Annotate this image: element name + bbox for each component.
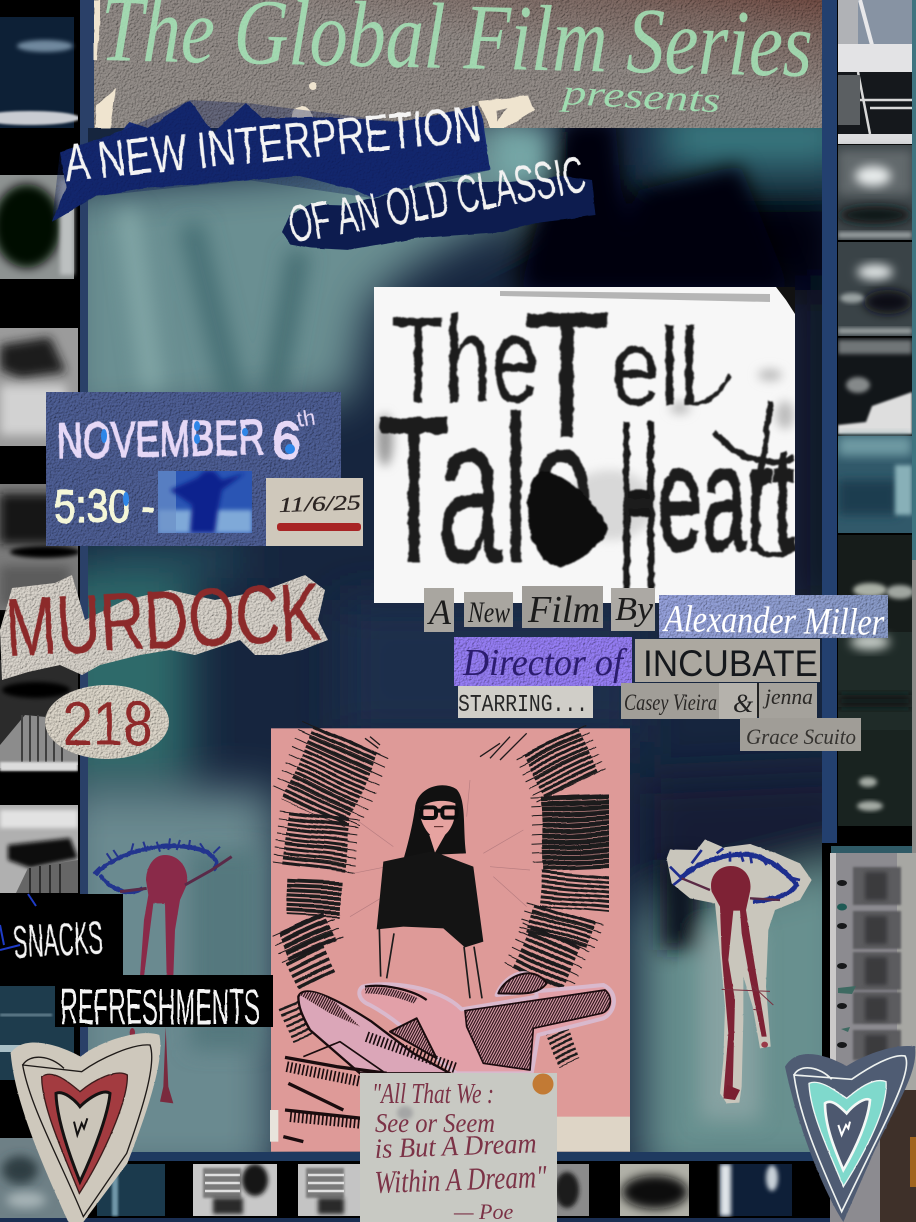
eyelid with thorns xyxy=(95,846,217,892)
paper heart with red outline xyxy=(11,1033,160,1222)
poem text: See or Seem xyxy=(375,1108,495,1138)
photo: blue silhouette xyxy=(158,471,252,533)
inner heart xyxy=(825,1099,870,1170)
bottom frame 2 xyxy=(193,1164,277,1216)
tag: A xyxy=(424,588,454,632)
title card: The Tell Tale Heart xyxy=(374,287,795,603)
pink illustration: figure with pointing hand xyxy=(270,728,630,1152)
pointing hand xyxy=(283,973,614,1142)
tag: A: A xyxy=(427,592,452,632)
outer heart line xyxy=(794,1056,907,1212)
figure xyxy=(350,780,530,998)
fine light rays xyxy=(350,780,530,917)
tag: Film: Film xyxy=(527,589,600,631)
note card: 11/6/25 xyxy=(266,478,363,546)
header panel: The Global Film Series presents xyxy=(94,0,822,132)
poem text: "All That We : xyxy=(372,1079,494,1110)
mouth xyxy=(434,825,443,828)
left bleeding eye xyxy=(93,838,232,1103)
poem text: Within A Dream" xyxy=(374,1158,548,1200)
title word: Tell: T xyxy=(523,274,611,476)
title word: eart: eart xyxy=(658,415,795,582)
glasses xyxy=(421,807,457,818)
text: presents: presents xyxy=(558,72,721,120)
right film strip xyxy=(838,0,914,826)
tag: ampersand xyxy=(719,683,759,719)
red heart band xyxy=(42,1073,127,1193)
film frame r1 xyxy=(838,0,912,144)
torn banner: of an old classic xyxy=(282,146,596,255)
film frame r3 xyxy=(838,242,912,336)
tag: ampersand: & xyxy=(733,689,754,718)
label: Snacks xyxy=(0,894,123,975)
label: Refreshments xyxy=(55,975,273,1035)
tag: Incubate: INCUBATE xyxy=(643,643,818,684)
radiating hatch marks xyxy=(290,740,580,1063)
tag: Grace Scuito: Grace Scuito xyxy=(746,724,856,749)
poem note xyxy=(360,1073,557,1222)
sweater xyxy=(377,852,483,947)
banner text line 2: OF AN OLD CLASSIC xyxy=(284,146,590,255)
title word: Tale: Tale xyxy=(378,373,594,608)
bottom frame 3 xyxy=(298,1164,360,1216)
bottom frame 1 xyxy=(97,1164,165,1216)
mint heart band xyxy=(809,1081,886,1187)
eyelid with thorns xyxy=(680,854,797,902)
small mark xyxy=(74,1118,87,1135)
title lettering xyxy=(378,311,795,589)
torn banner: a new interpretation xyxy=(52,95,490,222)
heavy ink blob xyxy=(527,470,607,566)
header cream paint marks xyxy=(94,0,534,132)
film frame r7 xyxy=(838,632,912,730)
film frame 3 xyxy=(0,328,78,446)
bottom frame 4 xyxy=(555,1164,589,1216)
film frame 2 xyxy=(0,175,74,279)
t crossbar and tail xyxy=(715,400,795,555)
poem text xyxy=(372,1079,548,1222)
tag: Jenna xyxy=(759,683,817,718)
film frame 5 xyxy=(0,660,78,771)
right bleeding eye on torn paper xyxy=(667,839,812,1103)
poem text: is But A Dream xyxy=(374,1128,537,1165)
film frame 7 xyxy=(0,986,74,1080)
ink wash smudges xyxy=(377,369,794,540)
negative frames xyxy=(853,867,901,1060)
text: November 6th: NOVEMBER xyxy=(56,409,265,469)
bottom film strip xyxy=(97,1164,792,1216)
outer heart line xyxy=(23,1045,152,1217)
iris and drips xyxy=(140,855,187,977)
film frame 1 xyxy=(0,17,80,128)
inner heart xyxy=(56,1092,110,1182)
legs xyxy=(379,928,482,998)
hair xyxy=(404,785,466,857)
face xyxy=(419,801,456,839)
film frame r6 xyxy=(838,535,914,632)
tag: Casey Vieira: Casey Vieira xyxy=(624,690,717,715)
blue scratches xyxy=(0,894,36,950)
text: 6: 6 xyxy=(272,412,301,470)
film frame r2 xyxy=(838,145,912,240)
blue dots in letters xyxy=(101,421,295,454)
tag: Starring: STARRING... xyxy=(458,692,588,719)
tag: Jenna: jenna xyxy=(762,684,813,709)
paper oval: 218 xyxy=(45,685,169,759)
bottom frame 6 xyxy=(720,1164,792,1216)
frame highlights xyxy=(865,872,887,1059)
text: 218: 218 xyxy=(63,690,153,759)
note card: 11/6/25: 11/6/25 xyxy=(278,490,361,517)
blurred eye photograph background xyxy=(88,128,822,1152)
sprocket holes xyxy=(837,880,847,1048)
film negative strip xyxy=(830,853,916,1222)
title word: The: The xyxy=(392,292,539,429)
tag: By: By xyxy=(615,591,654,628)
film frame r5 xyxy=(838,436,912,533)
torn paper label: Murdock xyxy=(0,567,328,680)
title word: Tell: ell xyxy=(611,307,699,429)
grey paper heart with mint outline xyxy=(785,1046,915,1222)
text: 5:30 -: 5:30 - xyxy=(54,480,154,532)
blue dot in 0 xyxy=(123,492,129,506)
tag: Casey Vieira xyxy=(621,683,719,719)
credit tags xyxy=(424,586,888,751)
left film strip xyxy=(0,17,80,1222)
title initial: H: H xyxy=(620,375,657,639)
orange dot xyxy=(532,1074,554,1094)
film frame r4 xyxy=(838,338,912,434)
flourish xyxy=(690,376,730,404)
tag: Director of: Director of xyxy=(462,642,627,684)
text: Murdock: MURDOCK xyxy=(3,567,323,674)
label: Refreshments: REFRESHMENTS xyxy=(60,979,260,1035)
film frame 4 xyxy=(0,484,80,610)
small mark xyxy=(838,1122,850,1135)
label: Snacks: SNACKS xyxy=(12,911,104,968)
film frame 8 xyxy=(0,1138,66,1218)
iris and drips xyxy=(711,866,767,1097)
date panel: November 6th xyxy=(46,392,363,546)
tag: New: New xyxy=(467,596,510,629)
film frame 6 xyxy=(0,805,78,893)
text: th: th xyxy=(295,405,317,432)
film frame r8 xyxy=(838,730,912,826)
banner text line 1: A NEW INTERPRETION xyxy=(62,95,483,193)
bottom frame 5 xyxy=(620,1164,689,1216)
